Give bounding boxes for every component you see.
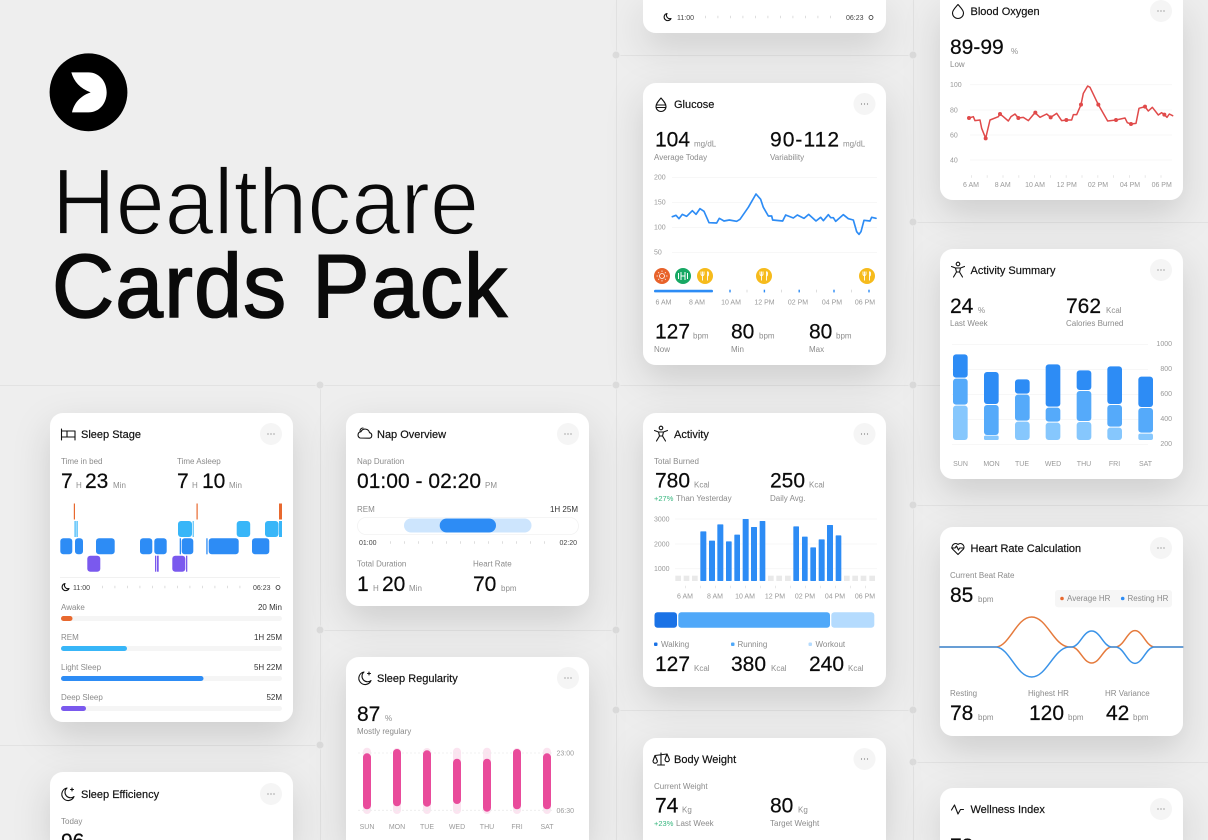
stat: max: 80 [809,320,832,344]
stat: max [809,320,852,354]
menu button [1150,537,1172,559]
chart: activity bars: 8 AM [707,594,723,600]
stat: regularity: 87 [357,703,380,726]
title: Healthcare [52,151,479,255]
icon: workout event [675,268,691,284]
timeline axis: 02 PM [788,300,808,306]
menu button [854,423,876,445]
chart: blood oxygen line [950,82,1173,189]
chart: activity bars: 06 PM [855,594,875,600]
stat: hr variance: HR Variance [1105,689,1150,698]
stat: heart rate: 70 [473,573,496,596]
title: Cards Pack [52,235,508,336]
stat: today: Today [61,817,82,826]
chart: weekly stacked bars [952,341,1172,468]
timeline axis: 10 AM [721,300,741,306]
stat: time asleep: H [192,481,198,490]
title [52,151,508,336]
chart: weekly stacked bars: TUE [1015,461,1029,468]
stat: time asleep: Min [229,481,242,490]
stat: oxygen range [950,36,1018,69]
chart: sleep regularity bars: FRI [511,824,523,831]
stat: min: bpm [759,332,775,340]
stat: nap duration: 01:00 - 02:20 [357,470,481,493]
stage: awake: 20 Min [258,603,282,612]
stat: oxygen range: 89-99 [950,36,1004,59]
panel: nap overview [346,413,589,606]
stat: average today [654,128,717,162]
stat: workout: Workout [816,640,846,649]
stage: deep sleep [61,693,282,711]
stat: daily average: 250 [770,470,805,492]
stat: total duration: Total Duration [357,560,406,568]
chart: blood oxygen line: 80 [950,108,958,114]
heading: Activity Summary [970,265,1056,277]
stat: total burned: Total Burned [654,457,699,466]
stat: time asleep: 7 [177,470,189,493]
chart: sleep regularity bars: WED [449,824,465,831]
chart: rem range [357,505,578,547]
chart: blood oxygen line: 02 PM [1088,182,1108,189]
heading: Nap Overview [377,429,446,441]
stat: highest hr: 120 [1029,702,1064,725]
icon: moon and star [359,672,371,684]
stat: running: Running [738,640,767,649]
chart: heart rate waves [939,617,1183,677]
icon row: daily events [654,268,875,284]
chart: sleep regularity bars: TUE [420,824,434,831]
chart: sleep regularity bars: THU [480,824,494,831]
stat: nap duration [357,457,497,493]
chart: sleep regularity bars: 23:00 [556,750,574,758]
timeline axis: 8 AM [689,300,705,306]
stage: deep sleep: 52M [266,693,282,702]
stat: time asleep: Time Asleep [177,457,221,466]
stage: light sleep [61,663,282,681]
timeline axis: 6 AM [656,300,672,306]
stat: variability: 90-112 [770,128,839,152]
chart: weekly stacked bars: 800 [1160,366,1172,373]
chart: weekly stacked bars: FRI [1109,461,1120,468]
stat: regularity: % [385,714,392,723]
menu button [1150,259,1172,281]
stage: light sleep: Light Sleep [61,663,102,672]
stat: oxygen range: % [1011,47,1018,56]
stat: running: 380 [731,653,766,676]
chart: glucose line: 100 [654,224,666,232]
menu button [854,748,876,770]
legend: Average HR [1067,594,1111,603]
stat: now: bpm [693,332,709,340]
chart: blood oxygen line: 100 [950,82,962,89]
chart: weekly stacked bars: SAT [1139,461,1153,468]
stat: daily average: Daily Avg. [770,494,805,503]
stat: min [731,320,775,354]
stat: max: bpm [836,332,852,340]
legend: Resting HR [1128,594,1169,603]
stage: awake [61,603,282,621]
stat: calories burned: 762 [1066,295,1101,318]
heading: Sleep Efficiency [81,789,160,801]
stat: target weight [770,794,820,828]
chart: blood oxygen line: 60 [950,132,958,140]
stage: deep sleep: Deep Sleep [61,693,103,702]
stat: walking: 127 [655,653,690,676]
stat: time in bed: 7 [61,470,73,493]
stat: total burned: Than Yesterday [676,494,732,503]
stat: average today: 104 [655,128,690,152]
icon: pulse [952,805,964,814]
stat: average today: mg/dL [694,140,717,148]
stat: time in bed: Min [113,481,126,490]
stat: regularity: Mostly regulary [357,727,411,736]
chart: rem range: 1H 25M [550,505,578,514]
stage: light sleep: 5H 22M [254,663,282,672]
stat: time asleep [177,457,242,493]
stat: calories burned: Kcal [1106,306,1122,315]
stat: variability: Variability [770,153,804,162]
stat: running [731,640,787,676]
chart: weekly stacked bars: 400 [1160,416,1172,423]
stat: today [61,817,282,840]
stat: current weight: Kg [682,806,692,814]
chart: weekly stacked bars: 600 [1160,391,1172,398]
chart: weekly stacked bars: 200 [1160,441,1172,448]
chart: activity bars: 02 PM [795,594,815,600]
chart: blood oxygen line: 40 [950,158,958,164]
chart: weekly stacked bars: WED [1045,461,1061,468]
stat: daily average: Kcal [809,480,825,490]
stat: time asleep: 10 [202,470,225,493]
stat: total burned: Kcal [694,480,710,490]
stat: hr variance [1105,689,1150,725]
menu button [557,423,579,445]
menu button [557,667,579,689]
icon: person [654,426,668,441]
stat: regularity [357,703,411,736]
chart: rem range: 02:20 [559,540,577,547]
stat: walking [654,640,710,676]
stat: current weight [654,782,715,828]
stat: total duration: 1 [357,573,369,596]
panel: sleep stage [50,413,293,722]
heading: Sleep Regularity [377,673,458,685]
heading: Blood Oxygen [970,6,1040,18]
stage: rem: 1H 25M [254,633,282,642]
stat: nap duration: PM [485,481,497,490]
panel: wellness index [940,788,1183,840]
panel: sleep regularity [346,657,589,840]
icon: moon and star [62,788,74,800]
timeline axis [654,290,875,306]
panel: activity [643,413,886,687]
chart: sleep regularity bars [358,748,574,831]
stat: max: Max [809,345,824,354]
stat: nap duration: Nap Duration [357,457,404,466]
stage: awake: Awake [61,603,85,612]
stat: now: 127 [655,320,690,344]
stat: calories burned: Calories Burned [1066,319,1123,328]
chart: sleep regularity bars: 06:30 [556,808,574,815]
chart: activity bars: 10 AM [735,594,755,600]
stat: time in bed: Time in bed [61,457,102,466]
heading: Body Weight [674,754,736,766]
stage: rem: REM [61,633,79,642]
stat: heart rate: Heart Rate [473,560,512,568]
heading: Heart Rate Calculation [970,543,1081,555]
chart: blood oxygen line: 04 PM [1120,182,1140,189]
stat: total duration [357,560,422,596]
chart: sleep regularity bars: MON [389,824,405,831]
icon: sunrise event [654,268,670,284]
chart: weekly stacked bars: THU [1077,461,1091,468]
stat: heart rate: bpm [501,584,517,593]
timeline axis: 06 PM [855,300,875,306]
stat: now: Now [654,345,670,354]
chart: blood oxygen line: 06 PM [1152,182,1172,189]
icon: person [952,262,964,277]
icon: glucose drop [656,98,666,112]
stat: highest hr: bpm [1068,713,1084,722]
chart: activity bars: 6 AM [677,594,693,600]
menu button [1150,798,1172,820]
stat: calories burned [1066,295,1123,328]
stage: rem [61,633,282,651]
chart: blood oxygen line: 8 AM [995,182,1011,189]
chart: activity bars: 3000 [654,516,670,524]
heading: Activity [674,429,709,441]
stat: current beat rate: 85 [950,584,973,607]
menu button [1150,0,1172,22]
stat: daily average [770,470,825,503]
stat: total duration: H [373,584,379,593]
stat: current weight: 74 [655,794,679,818]
stat: total burned: +27% [654,494,674,503]
stat: time in bed: 23 [85,470,108,493]
icon: meal events [697,268,875,284]
chart: activity bars: 2000 [654,542,670,548]
timeline axis: 04 PM [822,300,842,306]
stat: highest hr: Highest HR [1028,689,1069,698]
time axis: 11:00 [73,585,90,592]
chart: weekly stacked bars: SUN [953,461,968,468]
stat: resting: bpm [978,713,994,722]
icon: scale [653,753,669,765]
menu button [854,93,876,115]
legend [1055,590,1172,607]
time axis: 11:00 [677,15,694,22]
logo [50,53,127,131]
menu button [260,423,282,445]
stat: target weight: 80 [770,794,793,818]
heading: Glucose [674,99,714,111]
stat: walking: Walking [661,640,689,649]
stat: last week: % [978,306,985,315]
heading: Wellness Index [970,804,1045,816]
chart: blood oxygen line: 12 PM [1057,182,1077,189]
heading: Sleep Stage [81,429,141,441]
icon: drop [952,4,964,18]
chart: rem range: REM [357,505,375,514]
time axis [62,584,280,592]
stat: oxygen range: Low [950,60,965,69]
stat: current beat rate: Current Beat Rate [950,571,1015,580]
stat: current beat rate: bpm [978,595,994,604]
chart: activity bars: 1000 [654,566,670,573]
chart: activity bars [654,516,877,600]
icon: heart pulse [952,544,964,554]
stat: resting: Resting [950,689,977,698]
stat: hr variance: 42 [1106,702,1129,725]
stacked bar [654,612,874,628]
time axis: 06:23 [253,585,271,592]
stat: current beat rate [950,571,1015,607]
panel: heart rate calculation [939,527,1183,736]
menu button [260,783,282,805]
stat: last week: Last Week [950,319,989,328]
stat: target weight: Target Weight [770,819,820,828]
stat: workout: Kcal [848,664,864,673]
chart: blood oxygen line: 6 AM [963,182,979,189]
stat: total burned: 780 [655,470,690,492]
stat: min: Min [731,345,744,354]
time axis: 06:23 [846,15,864,22]
panel: activity summary [940,249,1183,479]
stat: average today: Average Today [654,153,707,162]
stat: current weight: Current Weight [654,782,708,791]
stat: variability: mg/dL [843,140,866,148]
chart: weekly stacked bars: 1000 [1156,341,1172,348]
stat: time in bed: H [76,481,82,490]
chart: glucose line: 150 [654,200,666,206]
stat: last week: 24 [950,295,974,318]
chart: glucose line [654,174,877,256]
panel: blood oxygen [940,0,1183,200]
timeline axis: 12 PM [754,300,775,306]
panel: body weight [643,738,886,840]
stat: running: Kcal [771,664,787,673]
stat: total duration: Min [409,584,422,593]
stat: workout: 240 [809,653,844,676]
chart: sleep regularity bars: SUN [360,824,374,831]
stat: walking: Kcal [694,664,710,673]
panel: sleep efficiency [50,772,293,840]
stat: hr variance: bpm [1133,713,1149,722]
stat: workout [808,640,864,676]
panel: sleep timeline card [643,0,886,33]
stat: variability [770,128,866,162]
stat: highest hr [1028,689,1084,725]
chart: glucose line: 50 [654,250,662,256]
stat: heart rate [473,560,517,596]
chart: activity bars: 04 PM [825,594,845,600]
panel: glucose [643,83,886,365]
time axis [664,14,873,22]
chart: glucose line: 200 [654,174,666,182]
chart: blood oxygen line: 10 AM [1025,182,1045,189]
icon: nap cloud [358,428,372,438]
stat: min: 80 [731,320,754,344]
icon: bed [62,429,75,440]
stat: current weight: +23% [654,819,674,828]
stat: resting: 78 [950,702,973,725]
stat: target weight: Kg [798,806,808,814]
chart: sleep regularity bars: SAT [540,824,554,831]
chart: sleep stages [60,504,282,572]
chart: weekly stacked bars: MON [983,461,1000,468]
stat: total burned [654,457,732,503]
stat: last week [950,295,989,328]
stat: now [654,320,709,354]
stat: total duration: 20 [382,573,405,596]
stat: resting [950,689,994,725]
stat: current weight: Last Week [676,819,715,828]
chart: rem range: 01:00 [359,540,377,547]
chart: activity bars: 12 PM [765,594,785,600]
stat: time in bed [61,457,126,493]
